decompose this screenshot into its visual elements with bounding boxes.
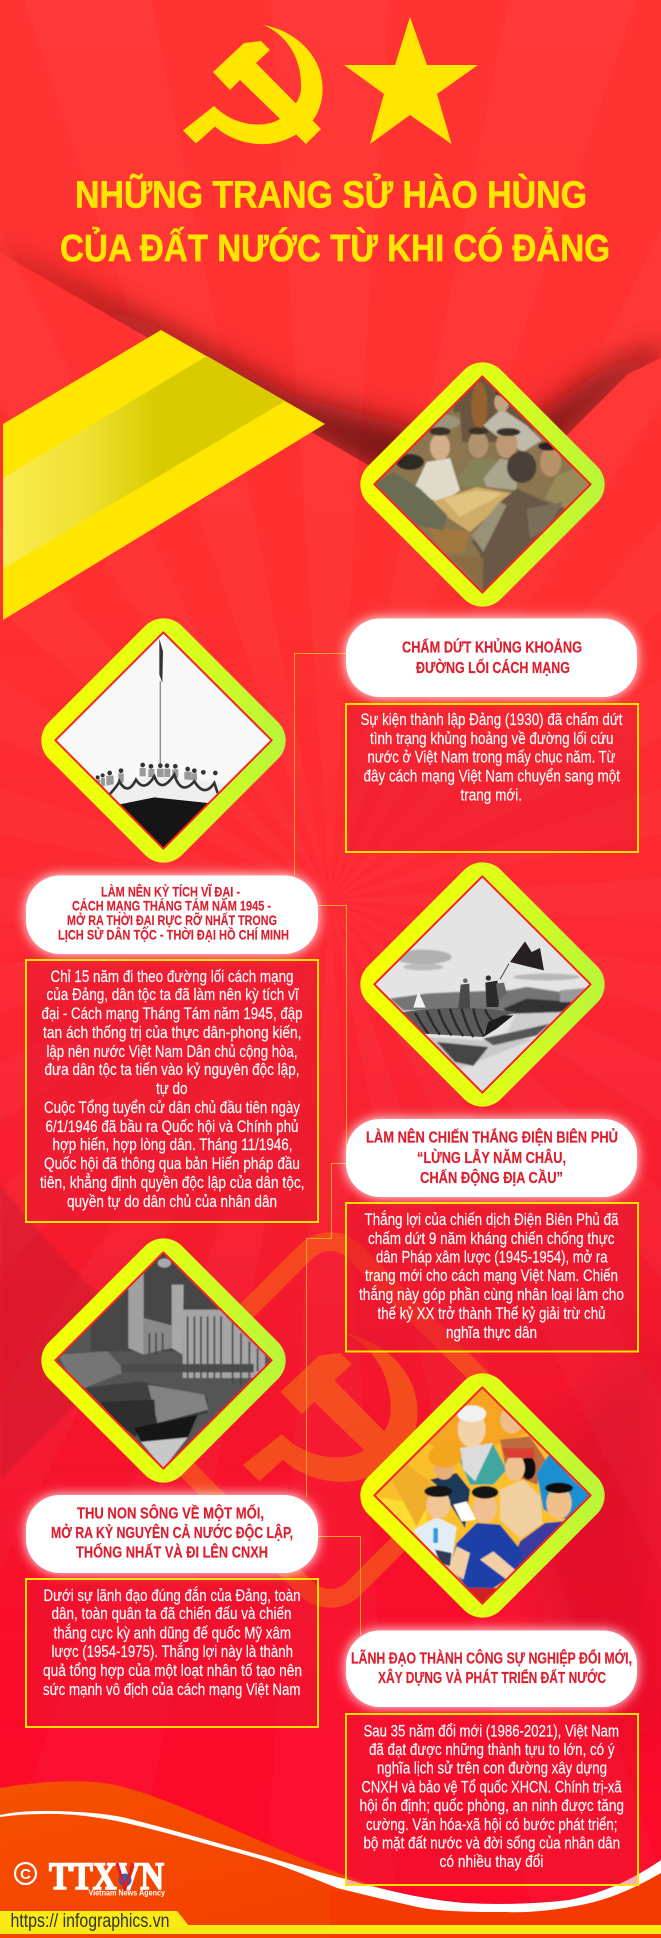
text box: dân Pháp xâm lược (1945-1954), mở ra (376, 1248, 608, 1266)
heading pill: LỊCH SỬ DÂN TỘC - THỜI ĐẠI HỒ CHÍ MINH (58, 926, 289, 942)
heading pill (26, 1495, 318, 1573)
text box (346, 704, 638, 852)
text box: có nhiều thay đổi (440, 1853, 544, 1871)
text box: tình trạng khủng hoảng về đường lối cứu (370, 730, 614, 748)
heading pill (346, 1119, 637, 1197)
title (60, 172, 610, 270)
text box: quyền tự do dân chủ của nhân dân (67, 1193, 277, 1211)
text box: dân, toàn quân ta đã chiến đấu và chiến (52, 1605, 292, 1623)
text box: thắng cực kỳ anh dũng đế quốc Mỹ xâm (54, 1624, 291, 1642)
heading pill: ĐƯỜNG LỐI CÁCH MẠNG (416, 657, 570, 677)
watermark: diamond and hammer and sickle (138, 1228, 522, 1612)
text box: tự do (156, 1080, 188, 1098)
logo: copyright and TTXVN: Vietnam News Agency (88, 1888, 165, 1898)
panel: Dien Bien Phu victory (346, 1119, 638, 1352)
text box (346, 1714, 638, 1885)
diamond photo 4: tank at palace gate (41, 1238, 286, 1483)
panel: August Revolution (26, 876, 318, 1222)
text box: đưa dân tộc ta tiến vào kỷ nguyên độc lập, (44, 1061, 300, 1079)
text box: đại - Cách mạng Tháng Tám năm 1945, đập (42, 1005, 302, 1023)
heading pill: CHẤM DỨT KHỦNG KHOẢNG (402, 638, 582, 656)
text box: 6/1/1946 đã bầu ra Quốc hội và Chính phủ (46, 1118, 298, 1136)
panel: Doi Moi (346, 1630, 638, 1885)
logo: copyright and TTXVN: TTXVN (49, 1855, 164, 1898)
text box: hợp hiến, hợp lòng dân. Tháng 11/1946, (52, 1136, 292, 1154)
text box: quả tổng hợp của một loạt nhân tố tạo nên (43, 1662, 302, 1680)
text box (26, 960, 318, 1222)
title: NHỮNG TRANG SỬ HÀO HÙNG (75, 172, 587, 216)
text box: lập nên nước Việt Nam Dân chủ cộng hòa, (46, 1043, 298, 1061)
text box (26, 1579, 318, 1727)
heading pill: CÁCH MẠNG THÁNG TÁM NĂM 1945 - (72, 898, 271, 914)
heading pill (346, 1630, 637, 1707)
text box: Cuộc Tổng tuyển cử dân chủ đầu tiên ngày (44, 1099, 301, 1117)
text box: nghĩa thực dân (446, 1324, 537, 1342)
diamond photo 5: people illustration (360, 1373, 605, 1618)
text box: nghĩa lịch sử trên con đường xây dựng (377, 1760, 607, 1778)
panel: reunification (26, 1495, 318, 1727)
text box: Dưới sự lãnh đạo đúng đắn của Đảng, toàn (44, 1586, 300, 1605)
heading pill: “LỪNG LẪY NĂM CHÂU, (417, 1148, 566, 1167)
heading pill (26, 876, 318, 954)
heading pill: THỐNG NHẤT VÀ ĐI LÊN CNXH (76, 1542, 268, 1562)
connector lines (294, 654, 360, 1635)
diamond photo 2: independence ceremony (41, 618, 286, 863)
footer wave (0, 1781, 661, 1938)
logo: copyright and TTXVN (15, 1855, 165, 1898)
heading pill: CHẤN ĐỘNG ĐỊA CẦU” (420, 1168, 563, 1187)
text box: sức mạnh vô địch của cách mạng Việt Nam (43, 1681, 300, 1699)
heading pill: MỞ RA THỜI ĐẠI RỰC RỠ NHẤT TRONG (67, 911, 277, 928)
heading pill: LÀM NÊN KỲ TÍCH VĨ ĐẠI - (101, 882, 240, 900)
top fold shadow (0, 242, 661, 466)
footer bar with website: https:// infographics.vn (10, 1911, 170, 1932)
text box: tan ách thống trị của thực dân-phong kiến, (43, 1024, 302, 1042)
panel: ending the crisis (346, 618, 638, 852)
text box (346, 1203, 638, 1352)
diamond photo 1: founding meeting painting (360, 362, 605, 607)
text box: của Đảng, dân tộc ta đã làm nên kỳ tích vĩ (46, 986, 300, 1004)
text box: Quốc hội đã thông qua bản Hiến pháp đầu (44, 1155, 300, 1173)
diamond photo 3: Dien Bien Phu flag (360, 862, 605, 1107)
text box: trang mới. (460, 786, 522, 804)
text box: tiên, khẳng định quyền độc lập của dân tộc, (40, 1173, 304, 1192)
footer bar with website (0, 1911, 661, 1934)
logo: copyright and TTXVN: C (20, 1866, 31, 1883)
text box: thế kỷ XX trở thành Thế kỷ giải trừ chủ (378, 1305, 606, 1323)
text box: lược (1954-1975). Thắng lợi này là thành (52, 1642, 293, 1661)
icon: star (344, 17, 478, 144)
heading pill (346, 618, 637, 697)
icon: hammer and sickle (183, 25, 323, 144)
text box: Chỉ 15 năm đi theo đường lối cách mạng (50, 968, 294, 986)
yellow ribbon (3, 330, 325, 620)
text box: chấm dứt 9 năm kháng chiến chống thực (368, 1230, 614, 1248)
heading pill: MỞ RA KỶ NGUYÊN CẢ NƯỚC ĐỘC LẬP, (51, 1523, 293, 1542)
heading pill: THU NON SÔNG VỀ MỘT MỐI, (77, 1502, 264, 1522)
